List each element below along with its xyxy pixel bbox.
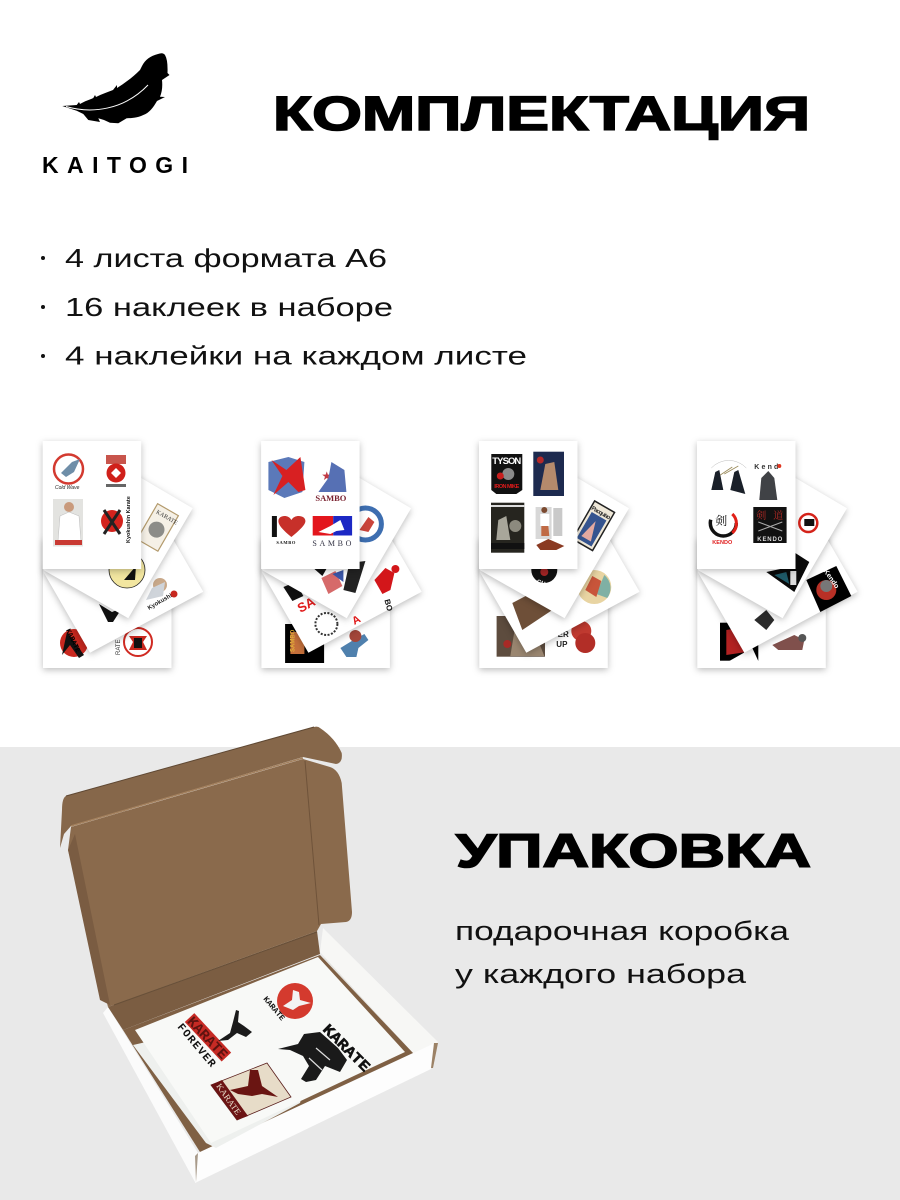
fanned sheet 3: Kendo	[822, 568, 840, 590]
bottom sheet: UP	[556, 640, 568, 649]
sticker: red circle karate	[261, 983, 313, 1023]
sticker: karate poster: KARATE	[214, 1081, 243, 1117]
bottom sheet	[261, 538, 390, 668]
fanned sheet 3: A	[350, 613, 363, 628]
fanned sheet 2	[698, 470, 847, 618]
fanned sheet 3: BO	[382, 598, 394, 612]
fanned sheet 2	[262, 470, 411, 618]
list item: stickers per sheet: 4 наклейки на каждом листе	[65, 340, 527, 370]
fanned sheet 3	[262, 511, 422, 653]
top sheet: Kyokushin Karate	[126, 496, 132, 543]
fanned sheet 2	[43, 470, 193, 618]
feature list	[41, 243, 527, 370]
fanned sheet 3	[698, 511, 858, 653]
sticker set: kendo	[697, 441, 858, 668]
top sheet	[261, 441, 360, 569]
bottom sheet	[479, 538, 608, 668]
sticker set: sambo	[261, 441, 422, 668]
panel: grey packaging background	[0, 747, 900, 1200]
fanned sheet 3: SA	[295, 594, 318, 616]
sticker: karate forever: FOREVER	[174, 1022, 217, 1070]
fanned sheet 2	[480, 470, 629, 618]
list item: sheets: 4 листа формата А6	[65, 243, 387, 273]
box lid	[60, 727, 352, 1007]
top sheet: ★	[321, 469, 332, 483]
sticker set: boxing	[479, 441, 640, 668]
bottom sheet: VER	[552, 630, 569, 639]
packaging description	[455, 916, 790, 989]
title: КОМПЛЕКТАЦИЯ	[273, 88, 810, 141]
top sheet: SAMBO	[276, 540, 296, 545]
fanned sheet 3: Kyokushin	[147, 591, 177, 612]
bottom sheet	[697, 538, 826, 668]
top sheet: KENDO	[757, 537, 783, 543]
description line 2: у каждого набора	[455, 959, 747, 989]
fanned sheet 3	[43, 511, 203, 653]
top sheet: 剣	[715, 512, 727, 529]
top sheet	[697, 441, 796, 569]
top sheet: SAMBO	[312, 539, 352, 548]
fanned sheet 2: Pacquiao	[590, 506, 611, 522]
fanned sheet 3	[480, 511, 640, 653]
sticker sheet inside box	[133, 957, 405, 1148]
box white body	[103, 928, 438, 1183]
bottom sheet: KARATE	[63, 628, 81, 654]
top sheet: Cold Wave	[55, 485, 80, 491]
bottom sheet: RATE	[116, 639, 122, 655]
gift box photo	[60, 727, 438, 1183]
top sheet	[43, 441, 141, 569]
heading: packaging: УПАКОВКА	[456, 824, 811, 877]
top sheet: 剣道	[756, 507, 783, 522]
sticker: karate forever	[174, 1010, 252, 1070]
sticker set: karate	[43, 441, 203, 668]
list item: stickers in set: 16 наклеек в наборе	[65, 292, 393, 322]
sticker: red circle karate: KARATE	[261, 995, 286, 1023]
bottom sheet: SAMBO	[290, 629, 296, 652]
top sheet: TYSON	[492, 456, 521, 467]
top sheet	[479, 441, 578, 569]
top sheet: KENDO	[712, 540, 733, 546]
top sheet: IRON MIKE	[494, 484, 520, 490]
icon: feather	[62, 53, 169, 123]
description line 1: подарочная коробка	[455, 916, 790, 946]
fanned sheet 2: CHAMP	[536, 579, 558, 592]
sticker: karate forever: KARATE	[183, 1014, 230, 1063]
top sheet: Kend	[754, 464, 778, 471]
bottom sheet	[43, 538, 172, 668]
fanned sheet 2: KARATE	[155, 510, 178, 527]
sticker: karate fighter	[278, 1022, 373, 1082]
sticker: karate fighter: KARATE	[318, 1022, 373, 1076]
logo wordmark: KAITOGI	[42, 152, 188, 178]
top sheet: SAMBO	[315, 493, 347, 503]
sticker: karate poster	[211, 1063, 291, 1120]
logo: Kaitogi	[42, 53, 188, 178]
